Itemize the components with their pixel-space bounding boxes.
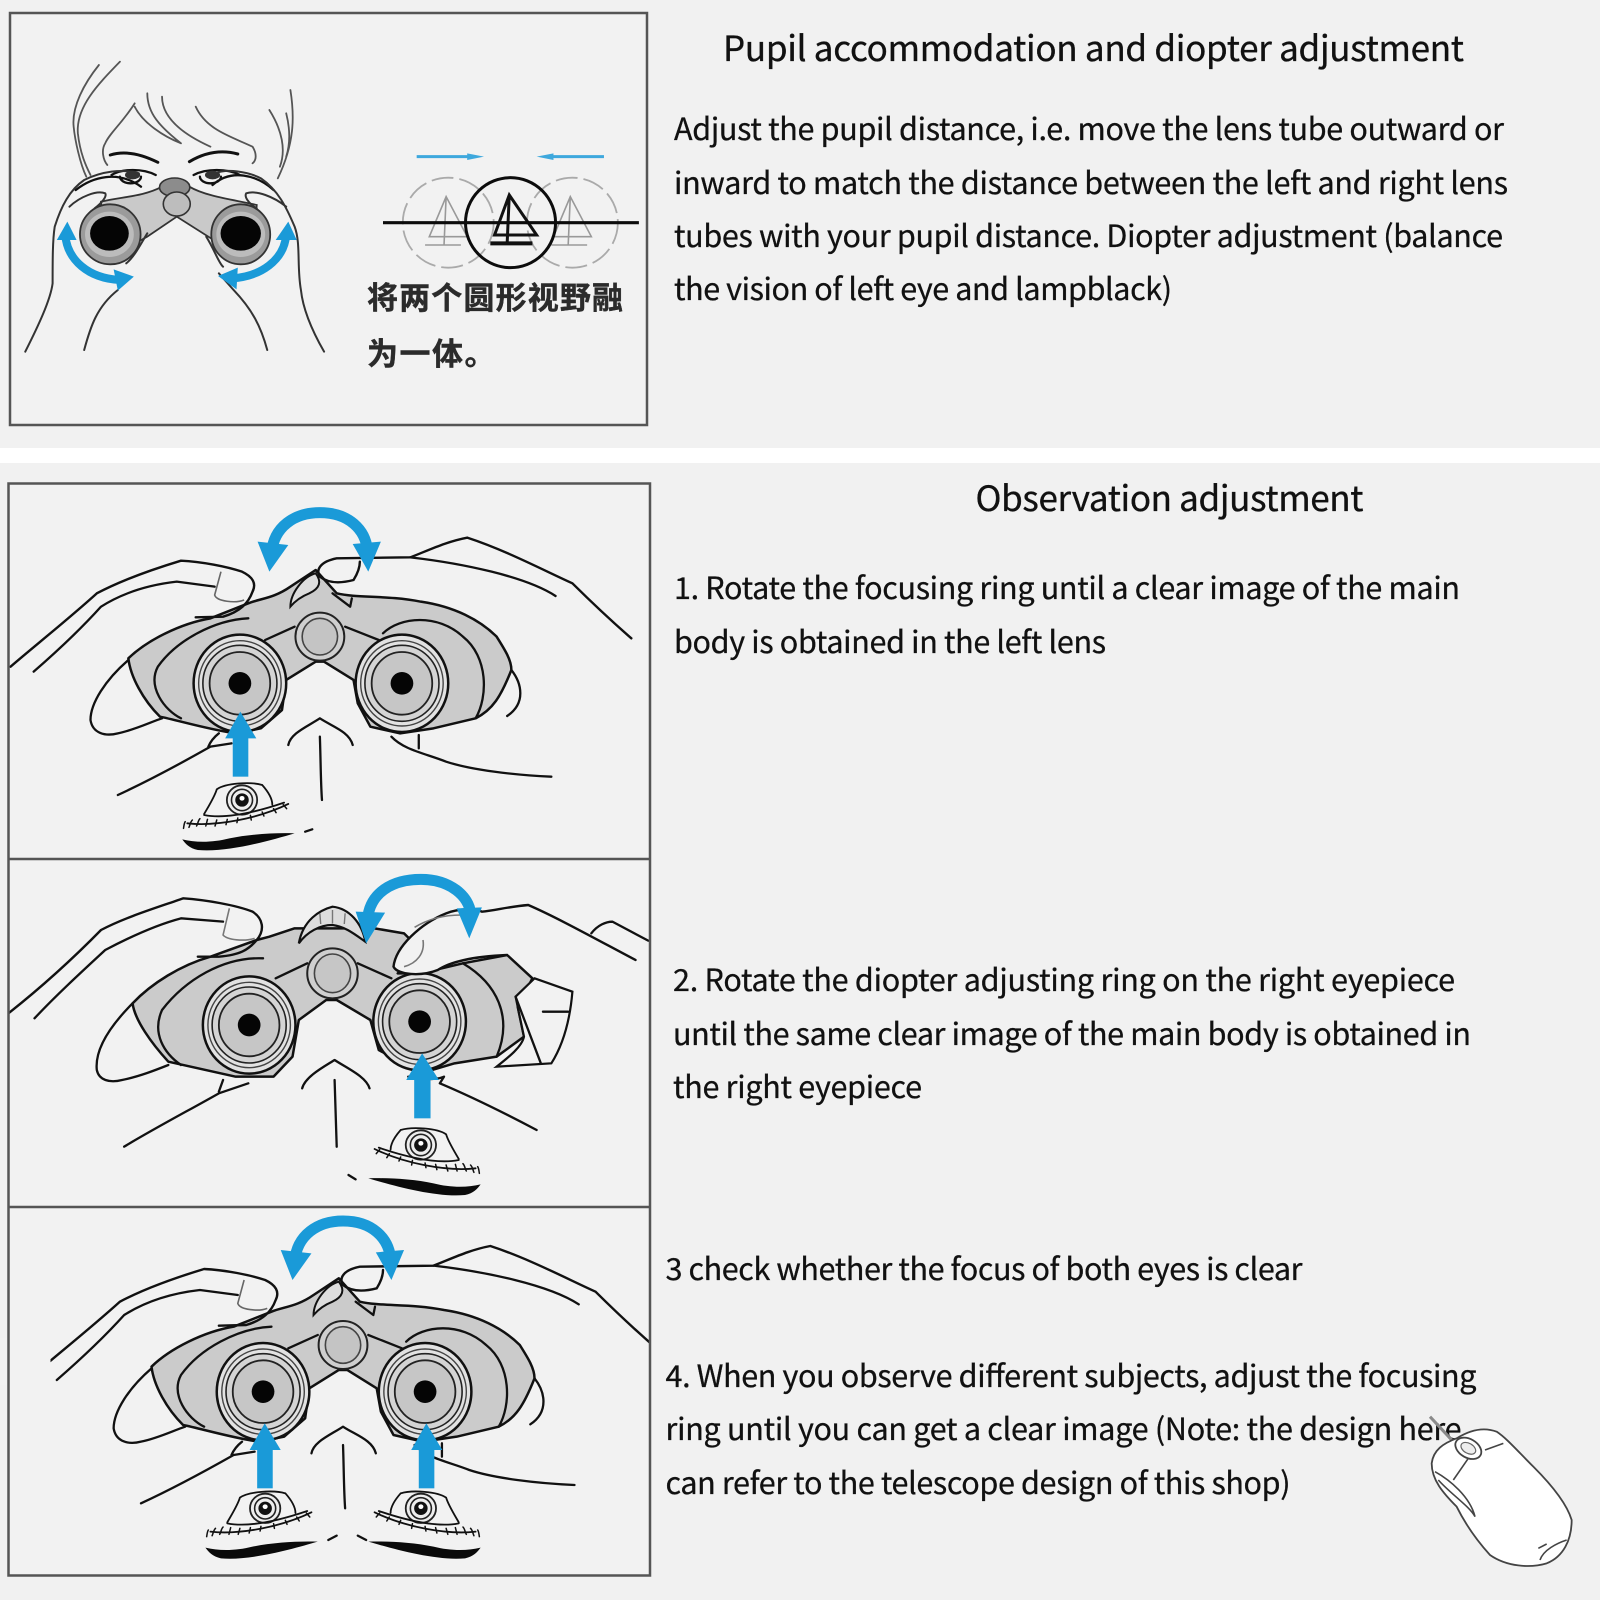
white separator band <box>0 448 1600 463</box>
text block: step 2: the right eyepiece <box>673 1063 922 1107</box>
illustration: step 3 both eyes check <box>0 1221 654 1559</box>
text block: pupil accommodation instructions: Adjust the pupil distance, i.e. move the lens tube outward or <box>674 105 1504 149</box>
illustration: person holding binoculars with rotation arrows <box>25 62 639 352</box>
caption continuation: 为一体。 <box>367 337 497 372</box>
panel: pupil accommodation illustration <box>10 13 647 425</box>
text block: step 2: until the same clear image of the main body is obtained in <box>673 1010 1471 1054</box>
text block: step 4: ring until you can get a clear image (Note: the design here <box>666 1405 1462 1449</box>
text block: pupil accommodation instructions: inward to match the distance between the left and right lens <box>674 159 1508 203</box>
text block: step 1: body is obtained in the left lens <box>674 618 1106 662</box>
panel: observation adjustment frames <box>0 484 664 1576</box>
heading: pupil accommodation: Pupil accommodation and diopter adjustment <box>723 21 1464 72</box>
text block: step 4: can refer to the telescope design of this shop) <box>666 1459 1290 1503</box>
mask: right margin beyond frame <box>650 1210 664 1370</box>
text block: step 3: 3 check whether the focus of both eyes is clear <box>666 1245 1303 1289</box>
text block: step 1: 1. Rotate the focusing ring until a clear image of the main <box>674 564 1460 608</box>
text block: step 2: 2. Rotate the diopter adjusting ring on the right eyepiece <box>673 956 1455 1000</box>
text block: pupil accommodation instructions <box>674 105 1508 309</box>
icon: computer mouse <box>1430 1417 1572 1566</box>
illustration: step 1 left eye focusing <box>11 513 631 850</box>
text block: step 4: 4. When you observe different subjects, adjust the focusing <box>666 1352 1476 1396</box>
text block: pupil accommodation instructions: tubes with your pupil distance. Diopter adjustment (balance <box>674 212 1503 256</box>
text block: step 4 <box>666 1352 1476 1503</box>
text block: step 2 <box>673 956 1471 1107</box>
heading: observation adjustment: Observation adjustment <box>976 471 1364 522</box>
illustration: step 2 right eyepiece diopter <box>9 879 648 1195</box>
text block: step 1 <box>674 564 1460 662</box>
caption: merge the two fields of view: 将两个圆形视野融 <box>367 281 623 316</box>
frame lines <box>8 484 650 1576</box>
diagram: merging two circular fields of view <box>383 153 639 268</box>
text block: pupil accommodation instructions: the vision of left eye and lampblack) <box>674 265 1172 309</box>
